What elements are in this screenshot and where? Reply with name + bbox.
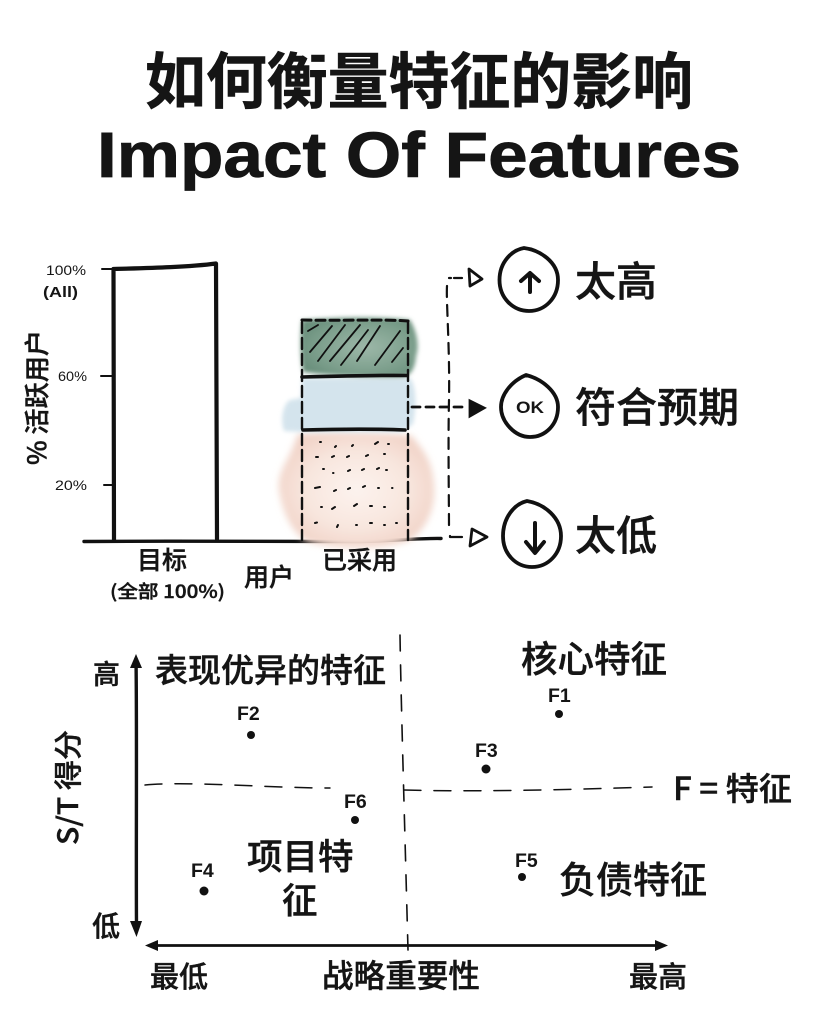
feature points: F3 [475, 740, 498, 762]
title: Impact Of Features [97, 119, 741, 191]
quadrant titles [155, 630, 707, 924]
feature points: F4 [191, 860, 214, 882]
status: as expected [501, 374, 739, 437]
arrowhead: low [470, 529, 487, 546]
dashed connector arrows [412, 269, 487, 546]
quadrant titles: 表现优异的特征 [155, 644, 386, 692]
axis labels [47, 653, 687, 997]
feature points [191, 685, 571, 896]
category labels [110, 541, 397, 604]
icon: OK circle [501, 375, 558, 437]
icon: OK circle: OK [516, 398, 545, 417]
y axis labels: 20% [55, 477, 87, 493]
icon: down arrow circle [503, 501, 561, 567]
category labels: (全部 100%) [110, 578, 225, 604]
quadrant titles: 核心特征 [521, 630, 667, 683]
title: 如何衡量特征的影响 [145, 32, 693, 121]
category labels: 目标 [137, 541, 187, 577]
axis ticks and baseline [84, 269, 441, 542]
quadrant chart [47, 630, 792, 997]
status: too high [500, 248, 657, 311]
icon: up arrow circle [500, 248, 558, 311]
axis labels: 高 [93, 653, 120, 692]
y axis labels: 100% [46, 262, 86, 278]
category labels: 已采用 [322, 541, 397, 577]
title [97, 32, 741, 191]
watercolor: blue segment [282, 378, 415, 432]
y axis title: % 活跃用户 [18, 330, 54, 465]
adopted stacked bar outline [302, 320, 408, 540]
quadrant titles: 项目特 [247, 829, 354, 880]
y axis labels: 60% [58, 368, 87, 384]
quadrant titles: 负债特征 [559, 850, 707, 904]
label: 太低 [575, 502, 657, 562]
target bar [114, 264, 217, 540]
arrowhead: ok [470, 401, 484, 416]
dots in peach segment [315, 442, 397, 527]
feature points: F1 [548, 685, 571, 707]
axis labels: 战略重要性 [322, 951, 480, 997]
feature points: F5 [515, 850, 538, 872]
label: 符合预期 [575, 374, 739, 434]
axis labels: 最高 [629, 954, 687, 996]
feature points: F6 [344, 791, 367, 813]
label: 太高 [575, 248, 657, 308]
y axis labels: (All) [43, 284, 78, 301]
axis labels: 最低 [150, 954, 208, 996]
bar chart: active users [18, 262, 441, 604]
axis labels: 低 [92, 905, 120, 945]
y axis arrow [130, 654, 142, 937]
watercolor: green segment [301, 317, 418, 377]
legend: F = 特征 [673, 764, 792, 810]
arrowhead: high [469, 269, 482, 286]
status: too low [503, 501, 657, 567]
category labels: 用户 [244, 558, 294, 594]
quadrant dividers [400, 635, 408, 950]
quadrant titles: 征 [282, 873, 318, 924]
hatching in green segment [308, 325, 403, 365]
feature points: F2 [237, 703, 260, 725]
y axis labels [43, 262, 87, 493]
axis labels: S/T 得分 [47, 730, 87, 845]
watercolor: peach segment [279, 432, 434, 548]
x axis arrow [145, 940, 668, 951]
